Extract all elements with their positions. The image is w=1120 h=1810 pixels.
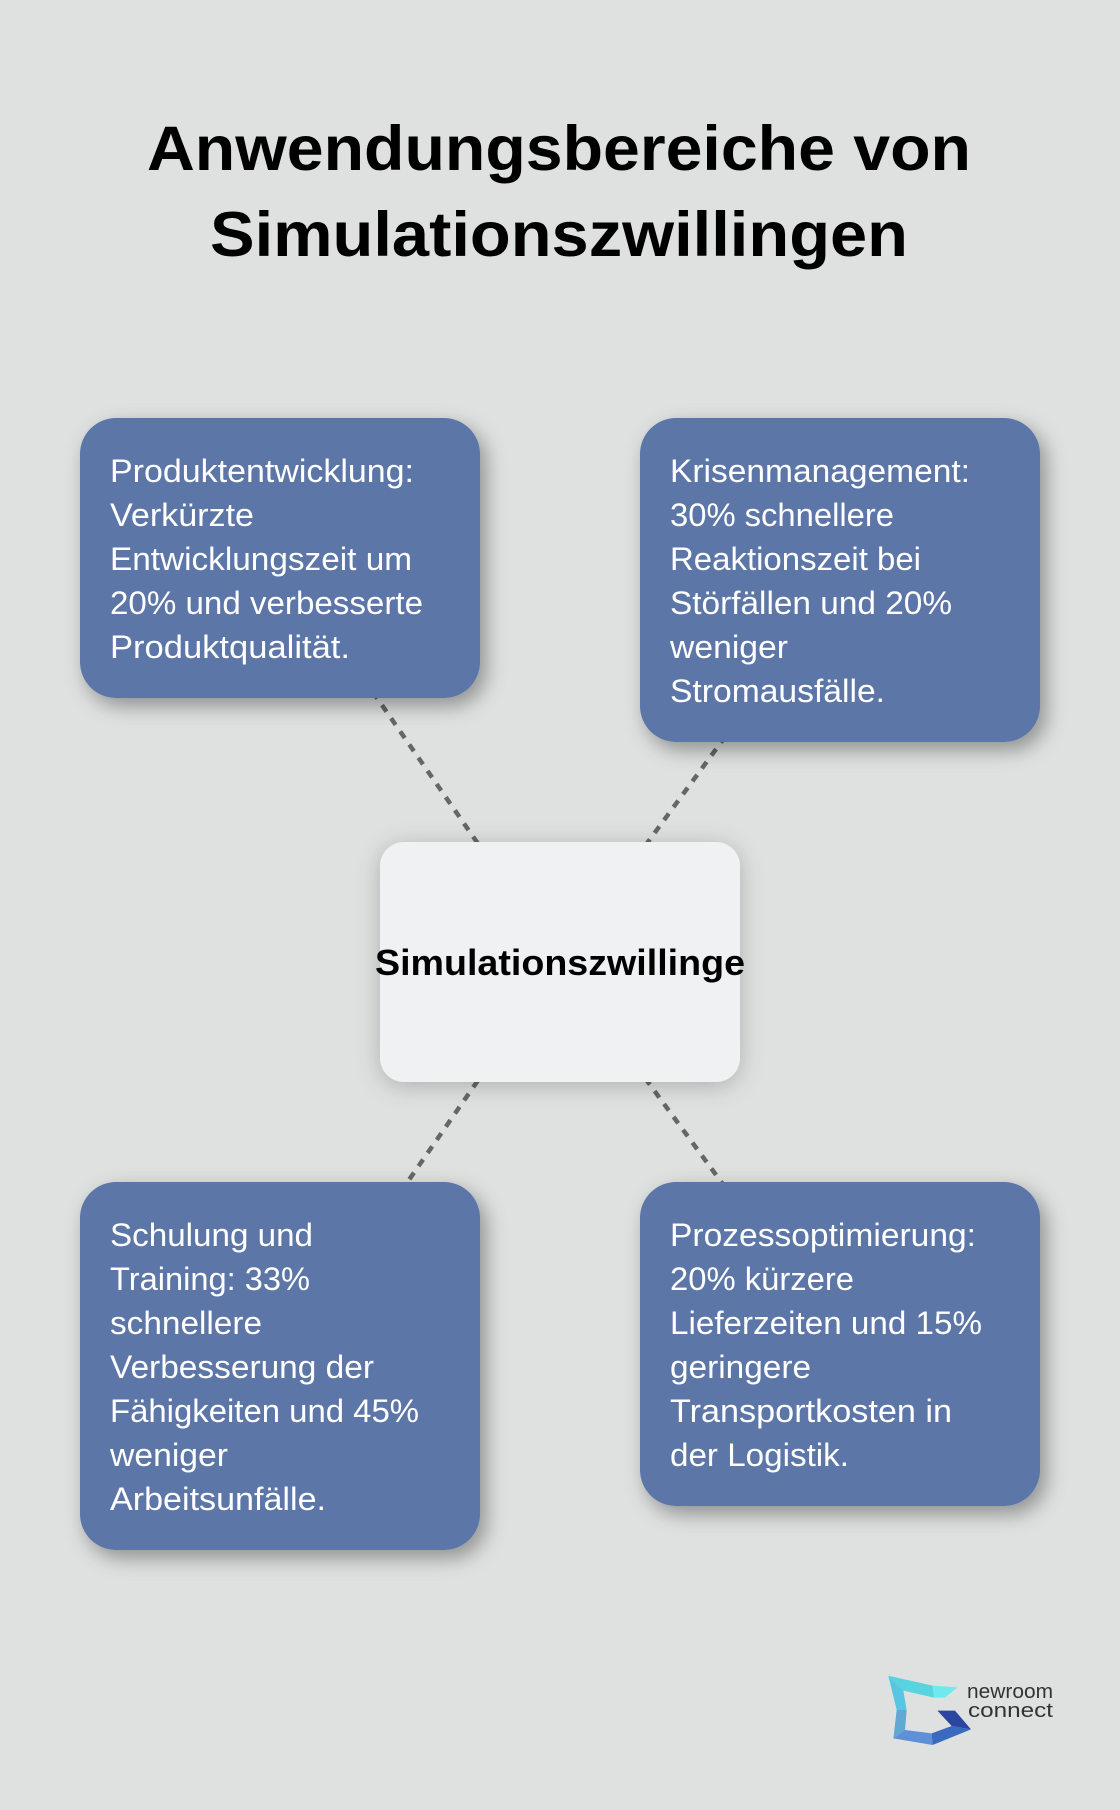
- card text: 30% schnellere: [670, 497, 894, 533]
- card text: Produktentwicklung:: [110, 453, 414, 489]
- logo: newroom connect: [888, 1676, 1054, 1745]
- card text: Schulung und: [110, 1217, 313, 1253]
- card text: schnellere: [110, 1305, 262, 1341]
- logo mark: [888, 1676, 971, 1745]
- center label: Simulationszwillinge: [375, 942, 745, 983]
- card text: Verbesserung der: [110, 1349, 374, 1385]
- card background: [640, 1182, 1040, 1506]
- card text: Entwicklungszeit um: [110, 541, 412, 577]
- card text: der Logistik.: [670, 1437, 849, 1473]
- card text: Verkürzte: [110, 497, 254, 533]
- card text: weniger: [109, 1437, 228, 1473]
- card text: Arbeitsunfälle.: [110, 1481, 326, 1517]
- card text: geringere: [670, 1349, 811, 1385]
- card text: Lieferzeiten und 15%: [670, 1305, 982, 1341]
- panel: Prozessoptimierung: [640, 1182, 1040, 1506]
- card text: Transportkosten in: [670, 1393, 952, 1429]
- card text: [670, 1217, 982, 1473]
- card text: [110, 453, 423, 665]
- card text: Prozessoptimierung:: [670, 1217, 976, 1253]
- card background: [80, 1182, 480, 1550]
- panel: Produktentwicklung: [80, 418, 480, 698]
- card text: Produktqualität.: [110, 629, 350, 665]
- card text: Training: 33%: [110, 1261, 310, 1297]
- card text: weniger: [669, 629, 788, 665]
- card background: [640, 418, 1040, 742]
- panel: Schulung und Training: [80, 1182, 480, 1550]
- logo wordmark: [967, 1681, 1054, 1722]
- card text: [669, 453, 970, 709]
- card text: Stromausfälle.: [670, 673, 885, 709]
- card text: 20% kürzere: [670, 1261, 854, 1297]
- card text: Fähigkeiten und 45%: [110, 1393, 419, 1429]
- panel: center Simulationszwillinge: [375, 842, 745, 1082]
- panel: Krisenmanagement: [640, 418, 1040, 742]
- card text: Störfällen und 20%: [670, 585, 952, 621]
- card text: [109, 1217, 419, 1517]
- center box: [380, 842, 740, 1082]
- logo wordmark: connect: [968, 1700, 1054, 1722]
- card text: Krisenmanagement:: [670, 453, 970, 489]
- card background: [80, 418, 480, 698]
- title: Simulationszwillingen: [210, 200, 908, 270]
- card text: Reaktionszeit bei: [670, 541, 921, 577]
- logo wordmark: newroom: [967, 1681, 1053, 1703]
- title: Anwendungsbereiche von: [147, 114, 971, 184]
- title: [147, 114, 971, 270]
- dashed connectors: [280, 558, 840, 1366]
- card text: 20% und verbesserte: [110, 585, 423, 621]
